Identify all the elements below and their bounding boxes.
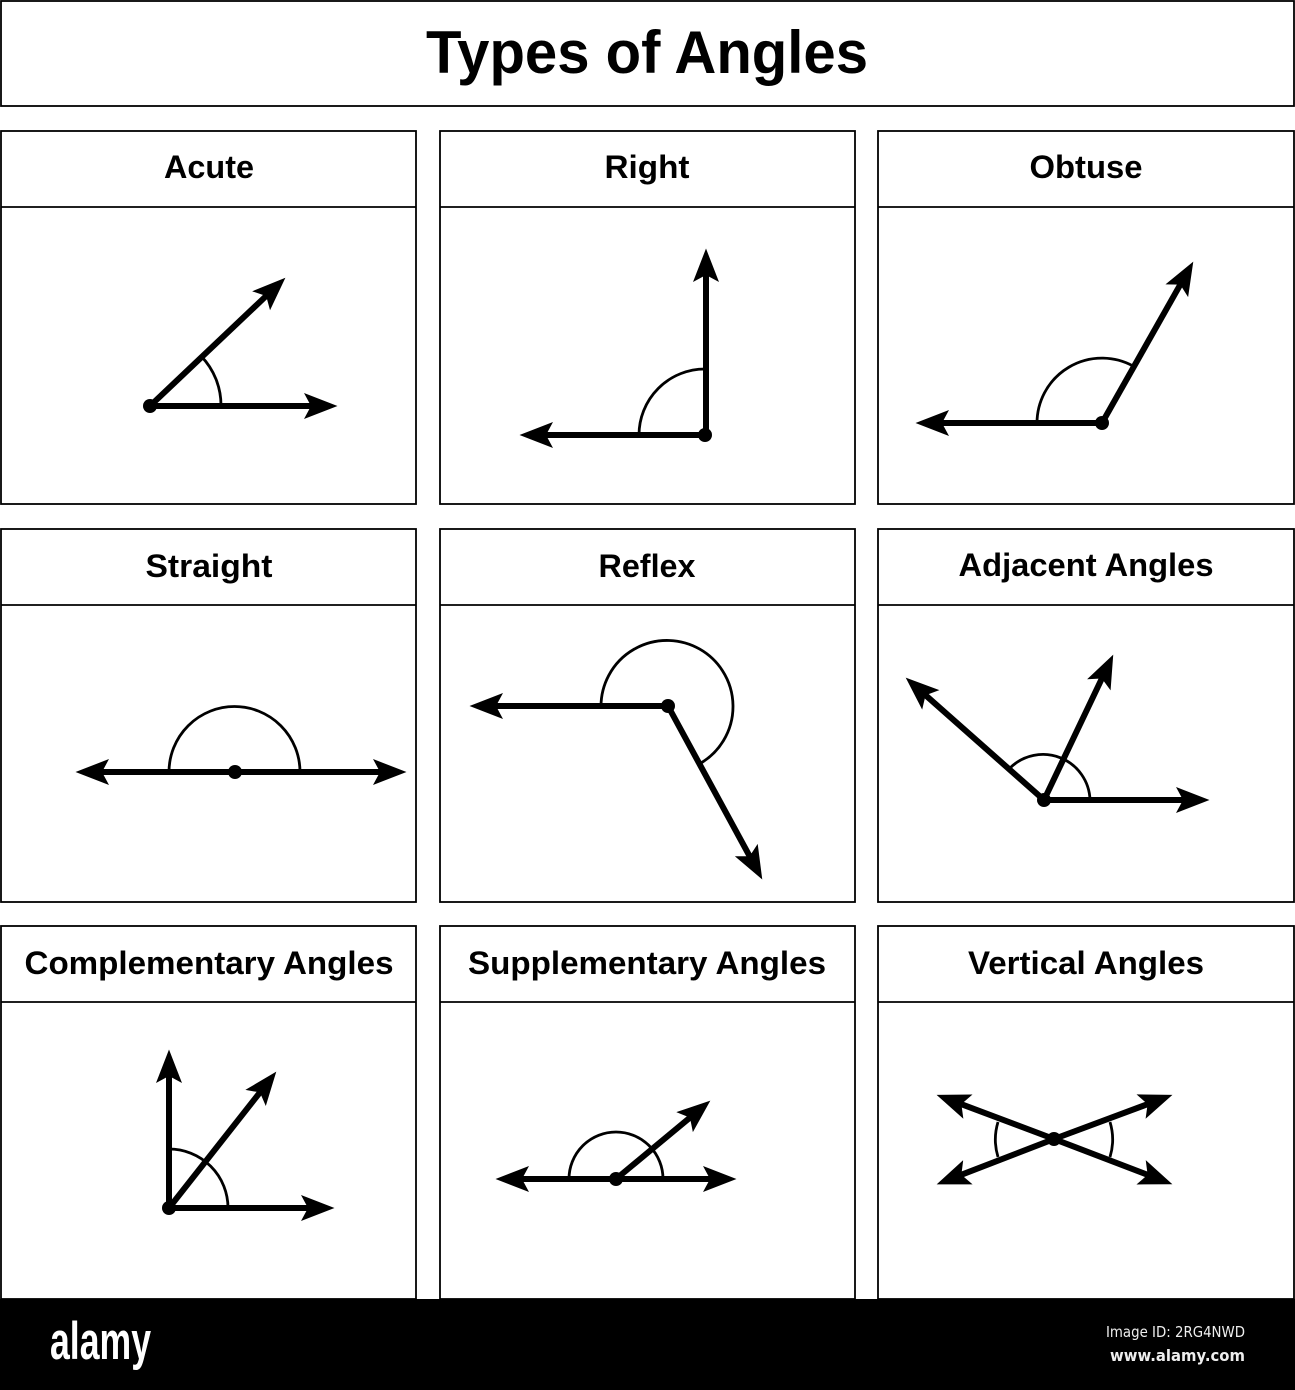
website: www.alamy.com (1110, 1346, 1245, 1365)
heading: adjacent angles: Adjacent Angles (958, 547, 1214, 583)
panel: adjacent angles (878, 529, 1294, 902)
heading: vertical angles: Vertical Angles (968, 945, 1204, 981)
panel: complementary angles (1, 926, 416, 1299)
heading: supplementary angles: Supplementary Angles (468, 945, 826, 981)
heading: right: Right (604, 149, 690, 185)
diagram: obtuse angle (937, 280, 1183, 430)
panel: reflex (440, 529, 855, 902)
diagram: adjacent angles (922, 674, 1188, 807)
heading: complementary angles: Complementary Angles (24, 945, 394, 981)
panel: straight (1, 529, 416, 902)
title (1, 1, 1294, 106)
heading: straight: Straight (146, 548, 273, 584)
panel: vertical angles (878, 926, 1294, 1299)
heading: acute: Acute (164, 149, 254, 185)
footer bar (0, 1299, 1295, 1390)
diagram: supplementary angles (517, 1114, 715, 1186)
panel: acute (1, 131, 416, 504)
diagram: straight angle (97, 707, 385, 779)
heading: reflex: Reflex (598, 548, 696, 584)
heading: obtuse: Obtuse (1030, 149, 1142, 185)
panel: right (440, 131, 855, 504)
diagram: complementary angles (162, 1071, 313, 1215)
diagram: vertical angles (957, 1102, 1152, 1177)
diagram: reflex angle (491, 640, 752, 861)
panel: supplementary angles (440, 926, 855, 1299)
footer logo: alamy (50, 1312, 151, 1371)
diagram: acute angle (143, 292, 316, 413)
image id: Image ID: 2RG4NWD (1106, 1323, 1245, 1341)
diagram: right angle (541, 270, 712, 442)
panel: obtuse (878, 131, 1294, 504)
title: Types of Angles (426, 19, 868, 86)
